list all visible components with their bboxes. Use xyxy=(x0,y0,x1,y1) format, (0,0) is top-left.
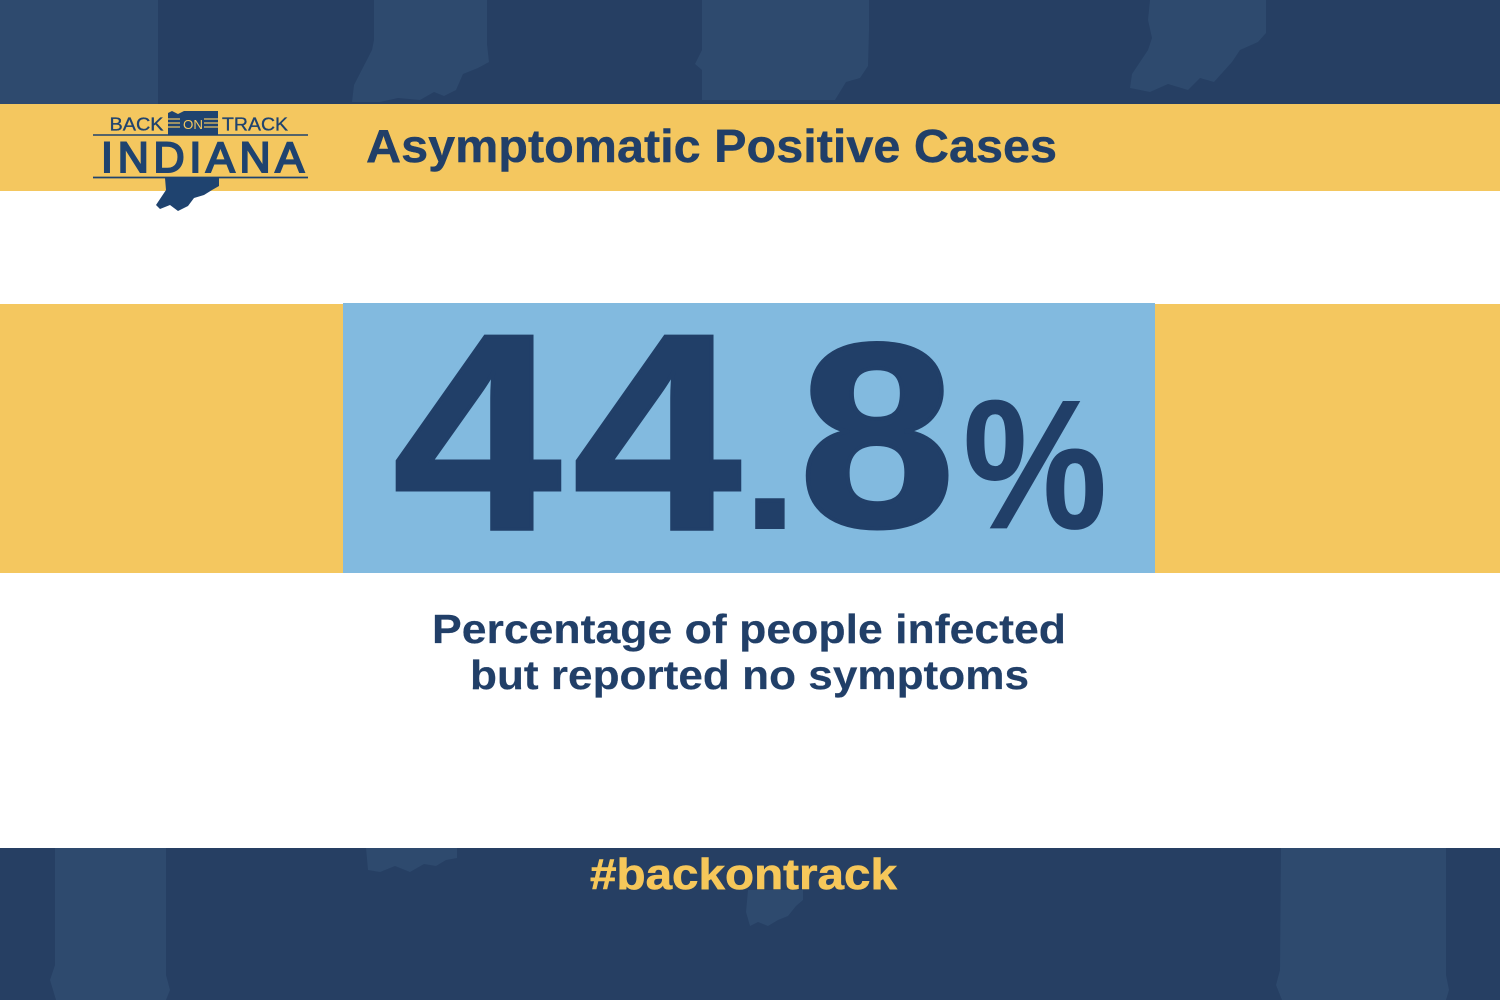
statistic: 44.8%: 4 xyxy=(573,277,743,589)
statistic: 44.8%: . xyxy=(745,365,795,566)
hashtag: #backontrack xyxy=(590,850,898,899)
yellow band behind statistic xyxy=(0,304,1500,573)
top navy band xyxy=(0,0,1500,104)
statistic: 44.8%: 8 xyxy=(799,289,955,582)
logo: Back on Track Indiana xyxy=(93,111,308,211)
statistic: 44.8%: % xyxy=(963,361,1107,567)
logo: Back on Track Indiana: BACK xyxy=(110,114,164,134)
statistic: 44.8%: 4 xyxy=(393,277,563,589)
title: Asymptomatic Positive Cases xyxy=(366,120,1057,172)
logo: Back on Track Indiana: ON xyxy=(183,118,203,132)
description xyxy=(432,606,1066,698)
statistic: 44.8% xyxy=(393,277,1107,589)
bottom navy band xyxy=(0,848,1500,1000)
logo: Back on Track Indiana: INDIANA xyxy=(101,134,304,182)
statistic panel xyxy=(343,303,1155,573)
description: but reported no symptoms xyxy=(470,652,1029,698)
description: Percentage of people infected xyxy=(432,606,1066,652)
logo: Back on Track Indiana: TRACK xyxy=(222,114,288,134)
header yellow band xyxy=(0,104,1500,191)
